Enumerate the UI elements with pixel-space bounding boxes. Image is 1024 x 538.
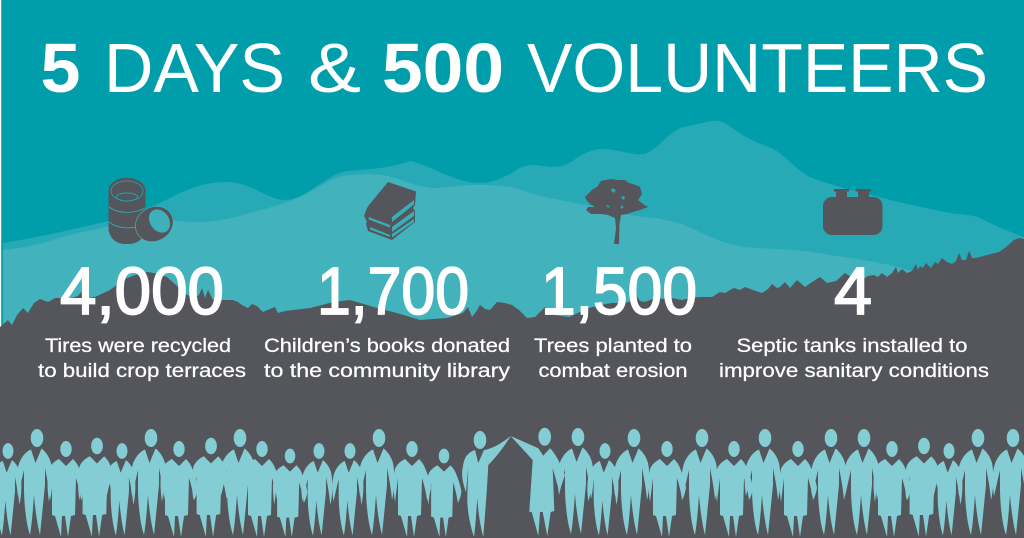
stat: trees: Trees planted to	[534, 336, 692, 357]
stat: books	[264, 254, 511, 382]
stat: books: 1,700	[317, 254, 469, 329]
dark foreground ridge	[0, 238, 1024, 538]
stat: books: Children’s books donated	[264, 336, 510, 357]
stat: septic tanks: Septic tanks installed to	[736, 336, 968, 357]
title: 5	[40, 29, 80, 107]
title: &	[308, 29, 361, 107]
title: DAYS	[104, 29, 285, 107]
stat: tires: Tires were recycled	[45, 336, 231, 357]
title: 500	[382, 29, 504, 107]
stat: tires: 4,000	[60, 254, 224, 329]
stat: septic tanks: improve sanitary conditions	[719, 361, 989, 382]
stat: tires	[38, 254, 246, 382]
icon: books	[364, 182, 416, 240]
stat: trees: 1,500	[541, 254, 697, 329]
icon: tires	[108, 178, 180, 248]
person with raised arm, left	[462, 431, 511, 537]
stat: septic tanks	[719, 254, 989, 382]
stat: septic tanks: 4	[834, 254, 872, 329]
person with raised arm, right	[511, 428, 565, 536]
icon: septic tank	[823, 189, 882, 235]
title	[40, 29, 988, 107]
front hill	[3, 174, 915, 340]
stat: trees: combat erosion	[538, 361, 688, 382]
stat: tires: to build crop terraces	[38, 361, 246, 382]
title: VOLUNTEERS	[527, 29, 988, 107]
icon: tree	[585, 179, 648, 244]
white left edge	[0, 0, 1, 400]
back mountain range	[3, 121, 1024, 330]
crowd of volunteers	[0, 428, 1024, 537]
stat: trees	[534, 254, 697, 382]
stat: books: to the community library	[264, 361, 511, 382]
